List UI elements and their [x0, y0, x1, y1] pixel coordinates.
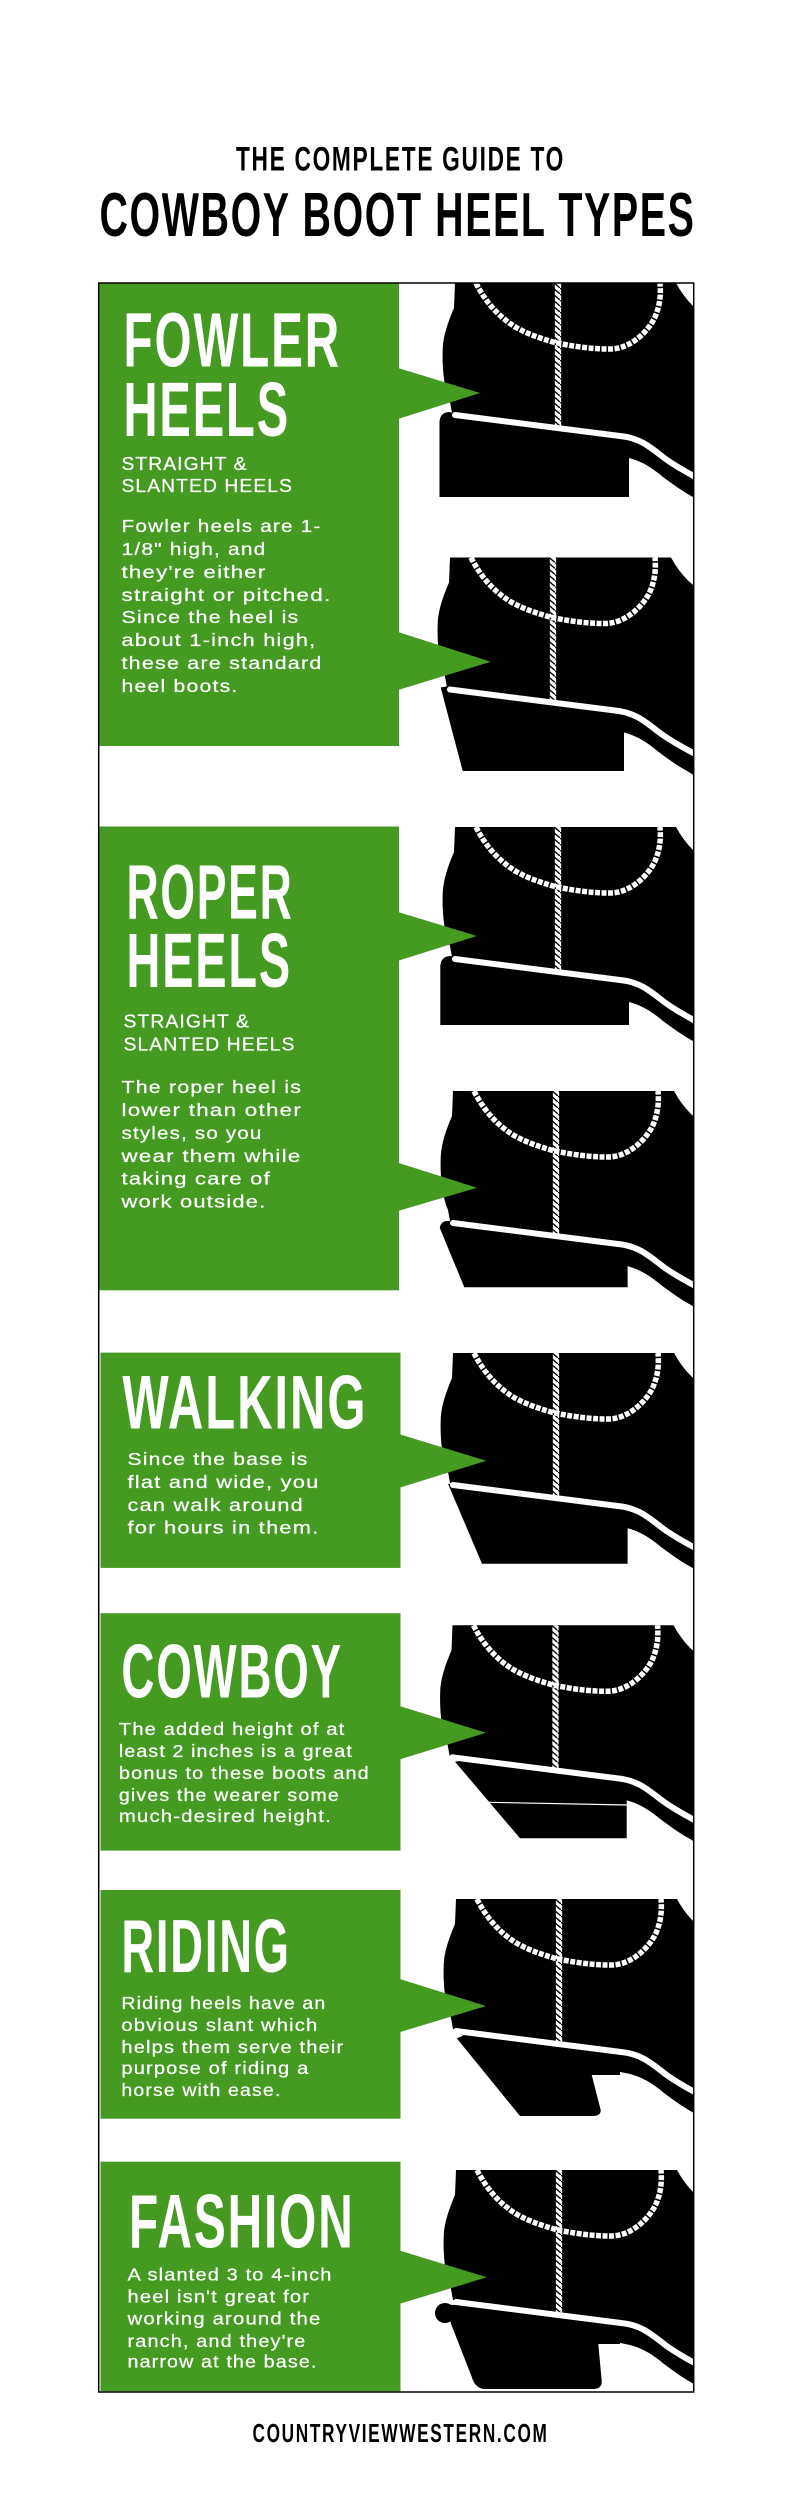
boot: straight fowler heel [440, 283, 703, 503]
heading: RIDING [121, 1904, 291, 1988]
heading: HEELS [124, 367, 290, 453]
description: 1/8" high, and [122, 539, 266, 559]
footer website: COUNTRYVIEWWESTERN.COM [252, 2418, 548, 2448]
description [122, 516, 332, 696]
description: work outside. [120, 1192, 266, 1212]
description [121, 1993, 344, 2100]
panel: fashion heel [100, 2162, 704, 2391]
description: flat and wide, you [128, 1472, 320, 1492]
panel: cowboy heel [100, 1613, 700, 1851]
green card [100, 826, 399, 1290]
green card [100, 1353, 400, 1568]
description: A slanted 3 to 4-inch [128, 2265, 332, 2285]
heading [126, 849, 294, 1004]
subheading: SLANTED HEELS [122, 476, 293, 496]
description: helps them serve their [121, 2037, 344, 2057]
description: working around the [126, 2309, 322, 2329]
description [119, 1719, 370, 1826]
green card [100, 1613, 400, 1851]
green card [100, 283, 399, 746]
title [100, 140, 696, 250]
arrow to walking heel [400, 1434, 486, 1488]
boot: slanted roper heel [440, 1091, 701, 1311]
description: horse with ease. [121, 2080, 281, 2100]
subheading [124, 1012, 296, 1054]
subheading: STRAIGHT & [122, 454, 248, 474]
description: lower than other [122, 1100, 302, 1120]
title line one: THE COMPLETE GUIDE TO [236, 140, 565, 178]
boot: slanted fowler heel [438, 558, 698, 778]
description: can walk around [128, 1495, 304, 1515]
description: purpose of riding a [121, 2058, 309, 2078]
boot: walking heel [441, 1353, 701, 1573]
heading: FOWLER [124, 298, 341, 384]
subheading [122, 454, 293, 496]
description [126, 2265, 332, 2372]
heading: HEELS [126, 918, 292, 1004]
description: they're either [122, 562, 266, 582]
subheading: STRAIGHT & [124, 1012, 250, 1032]
description: these are standard [122, 653, 322, 673]
panel: roper heels [100, 826, 703, 1311]
description: least 2 inches is a great [119, 1741, 353, 1761]
description: straight or pitched. [122, 585, 332, 605]
arrow to fashion heel [400, 2250, 487, 2304]
green card [100, 1890, 400, 2119]
panel: fowler heels [100, 283, 703, 778]
description: The added height of at [119, 1719, 345, 1739]
description: The roper heel is [122, 1077, 302, 1097]
description: heel isn't great for [128, 2287, 310, 2307]
description: styles, so you [122, 1123, 262, 1143]
heading: FASHION [129, 2180, 355, 2265]
description: taking care of [122, 1169, 271, 1189]
arrow to slanted roper heel [398, 1163, 477, 1211]
description: about 1-inch high, [122, 630, 316, 650]
description: for hours in them. [128, 1518, 320, 1538]
arrow to straight fowler heel [398, 368, 480, 419]
description: Riding heels have an [121, 1993, 326, 2013]
arrow to straight roper heel [398, 912, 477, 961]
heading: ROPER [126, 849, 294, 935]
boot: riding heel [444, 1899, 704, 2119]
description: Since the base is [128, 1449, 308, 1469]
description: wear them while [120, 1146, 302, 1166]
description: gives the wearer some [119, 1785, 340, 1805]
green card [100, 2162, 400, 2391]
arrow to cowboy heel [400, 1706, 486, 1760]
frame [99, 283, 694, 2392]
description: Fowler heels are 1- [122, 516, 322, 536]
description: obvious slant which [121, 2015, 318, 2035]
boot: fashion heel [435, 2170, 704, 2390]
subheading: SLANTED HEELS [124, 1034, 296, 1054]
description: much-desired height. [119, 1806, 332, 1826]
heading: WALKING [122, 1361, 367, 1446]
panel: walking heel [100, 1353, 701, 1573]
arrow to slanted fowler heel [398, 632, 491, 690]
description: narrow at the base. [128, 2352, 318, 2372]
description [120, 1077, 302, 1212]
boot: straight roper heel [440, 827, 703, 1047]
panel: riding heel [100, 1890, 704, 2119]
heading [124, 298, 341, 453]
heading: COWBOY [121, 1629, 343, 1714]
boot: cowboy heel [440, 1625, 700, 1845]
description: heel boots. [122, 676, 238, 696]
description: bonus to these boots and [119, 1763, 370, 1783]
arrow to riding heel [400, 1979, 486, 2032]
description: ranch, and they're [128, 2331, 306, 2351]
description [128, 1449, 320, 1538]
description: Since the heel is [122, 607, 300, 627]
